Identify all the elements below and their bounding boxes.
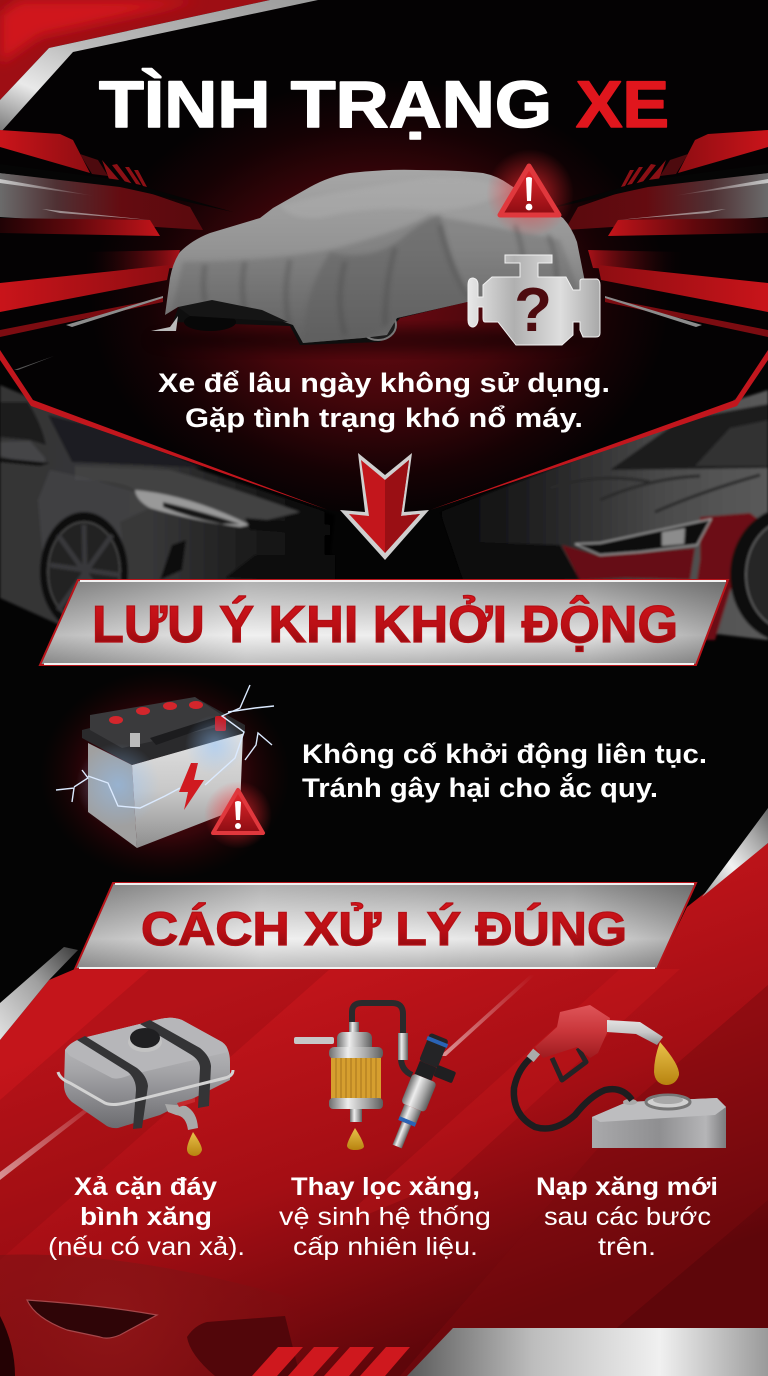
corner: left silver stripe [0, 947, 78, 1040]
left car background [0, 385, 335, 640]
speed streaks left [0, 130, 233, 370]
illustration: covered car [150, 170, 590, 352]
banner: starting note: LƯU Ý KHI KHỞI ĐỘNG [92, 595, 678, 654]
text: step 2: vệ sinh hệ thống [279, 1203, 491, 1231]
text: step 1: (nếu có van xả). [48, 1233, 245, 1261]
panel border: red lines [0, 350, 768, 510]
banner: correct handling [75, 883, 696, 969]
arrow: down [340, 453, 429, 560]
title: XE [576, 67, 669, 141]
panel: red bottom section [0, 843, 768, 1376]
text: step 1 [48, 1173, 245, 1261]
text: step 3: Nạp xăng mới [536, 1173, 718, 1201]
footer: slanted stripes [252, 1347, 410, 1376]
icon: engine with question mark [468, 255, 600, 345]
text: car condition: Gặp tình trạng khó nổ máy. [185, 403, 583, 433]
icon: warning triangle [486, 149, 574, 237]
banner: starting note [40, 580, 728, 665]
text: car condition: Xe để lâu ngày không sử dụng. [158, 368, 610, 398]
text: step 2: Thay lọc xăng, [291, 1173, 480, 1201]
icon: fuel nozzle and can [514, 1005, 726, 1148]
text: step 3: sau các bước [544, 1203, 711, 1231]
text: step 3: trên. [598, 1233, 656, 1261]
text: starting warning [302, 739, 707, 803]
text: step 2: cấp nhiên liệu. [293, 1233, 478, 1261]
text: step 1: bình xăng [80, 1203, 212, 1231]
corner: right silver stripe [702, 808, 768, 897]
corner: top-left red and silver [0, 0, 318, 133]
text: step 2 [279, 1173, 491, 1261]
icon: engine with question mark: ? [514, 276, 552, 345]
text: starting warning: Tránh gây hại cho ắc quy. [302, 772, 658, 803]
icon: warning triangle on battery [204, 781, 272, 849]
text: step 3 [536, 1173, 718, 1261]
panel: top dark red octagon [0, 0, 768, 520]
icon: battery with sparks [56, 685, 274, 848]
text: starting warning: Không cố khởi động liên tục. [302, 739, 707, 769]
title: TÌNH TRẠNG [99, 67, 552, 141]
icon: fuel filter and injector [294, 1003, 466, 1157]
footer: silver bar [407, 1328, 768, 1376]
icon: fuel tank [58, 1018, 233, 1156]
banner: correct handling: CÁCH XỬ LÝ ĐÚNG [141, 902, 627, 955]
glow: behind battery [40, 670, 290, 880]
right car background [440, 390, 768, 643]
text: step 1: Xả cặn đáy [74, 1173, 217, 1201]
speed streaks right [535, 130, 768, 337]
text: car condition [158, 368, 610, 433]
